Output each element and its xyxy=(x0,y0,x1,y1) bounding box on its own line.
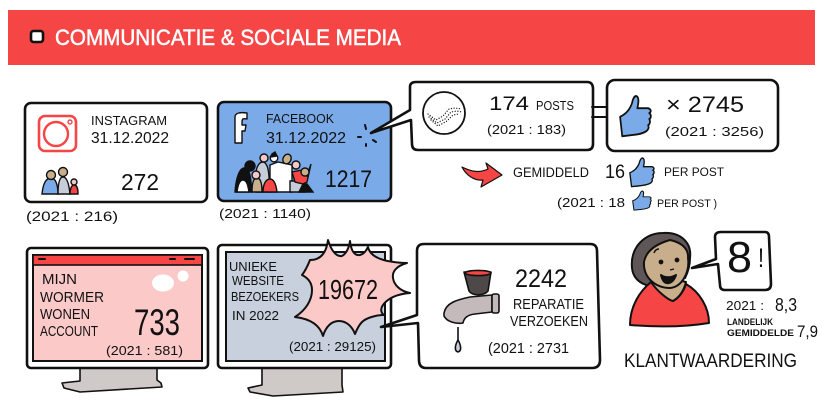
rating exclamation: ! xyxy=(758,243,764,273)
panel: facebook xyxy=(218,102,391,201)
repair label: VERZOEKEN xyxy=(510,314,588,330)
icon: crowd xyxy=(235,152,313,192)
likes count: × 2745 xyxy=(666,92,744,117)
rating value: 8 xyxy=(727,233,752,282)
panel: instagram xyxy=(25,103,207,202)
per post label: PER POST xyxy=(664,165,725,179)
connector between bubbles xyxy=(592,107,608,117)
website label: UNIEKE xyxy=(229,260,277,274)
account label xyxy=(40,271,104,340)
icon: facebook f xyxy=(235,113,247,143)
website label xyxy=(229,260,299,323)
rating 2021: 2021 : xyxy=(726,298,764,313)
website label: WEBSITE xyxy=(232,274,284,288)
icon: three people xyxy=(42,168,78,194)
posts count: 174 xyxy=(489,94,530,115)
account label: ACCOUNT xyxy=(40,323,98,340)
website count: 19672 xyxy=(318,274,378,305)
website label: BEZOEKERS xyxy=(231,290,299,304)
instagram previous year: (2021 : 216) xyxy=(26,208,118,224)
facebook date: 31.12.2022 xyxy=(266,130,346,147)
icon: header bullet xyxy=(31,31,43,42)
posts label: POSTS xyxy=(536,98,574,113)
panel: likes xyxy=(607,80,778,151)
account label: WORMER xyxy=(40,289,104,306)
header banner xyxy=(8,10,815,65)
arrow: red arrow xyxy=(462,163,502,187)
rating heading: KLANTWAARDERING xyxy=(624,351,797,372)
average value: 16 xyxy=(605,162,625,183)
panel: website monitor xyxy=(218,240,410,396)
panel: account monitor xyxy=(27,248,208,392)
rating speech bubble xyxy=(692,232,771,290)
website previous year: (2021 : 29125) xyxy=(289,340,376,354)
icon: round post image xyxy=(423,92,465,134)
monitor stand xyxy=(62,368,162,392)
panel: posts speech bubble xyxy=(371,82,593,150)
previous year per post: PER POST ) xyxy=(657,198,717,210)
account previous year: (2021 : 581) xyxy=(106,344,183,358)
icon: thumbs up tiny xyxy=(633,191,651,210)
national label: LANDELIJK xyxy=(727,317,773,328)
likes previous year: (2021 : 3256) xyxy=(665,124,764,139)
starburst xyxy=(295,240,410,336)
browser bar xyxy=(33,255,202,265)
monitor stand xyxy=(248,368,343,396)
website label: IN 2022 xyxy=(232,309,279,323)
icon: thumbs up xyxy=(620,96,651,136)
repair label xyxy=(510,297,588,330)
repair label: REPARATIE xyxy=(513,297,584,313)
icon: woman xyxy=(630,233,709,326)
repair count: 2242 xyxy=(515,265,567,293)
instagram heading: INSTAGRAM xyxy=(91,113,167,128)
national value: 7,9 xyxy=(797,322,818,341)
instagram count: 272 xyxy=(121,169,159,195)
repair previous year: (2021 : 2731 xyxy=(488,340,569,357)
facebook previous year: (2021 : 1140) xyxy=(219,206,311,221)
title: COMMUNICATIE & SOCIALE MEDIA xyxy=(55,25,401,50)
facebook heading: FACEBOOK xyxy=(266,111,334,126)
sparkle xyxy=(358,125,376,146)
account count: 733 xyxy=(134,302,180,343)
national label: GEMIDDELDE xyxy=(727,328,794,339)
instagram date: 31.12.2022 xyxy=(91,130,169,147)
posts previous year: (2021 : 183) xyxy=(487,123,566,137)
highlight xyxy=(152,270,188,292)
national label xyxy=(727,317,794,339)
previous year average: (2021 : 18 xyxy=(557,196,625,210)
average label: GEMIDDELD xyxy=(513,165,589,180)
rating 2021 value: 8,3 xyxy=(775,295,797,315)
panel: repair requests bubble xyxy=(381,244,600,368)
icon: thumbs up small xyxy=(630,158,654,187)
panel: customer rating xyxy=(624,232,818,372)
icon: dripping tap xyxy=(444,270,499,352)
account label: MIJN xyxy=(42,271,77,288)
account label: WONEN xyxy=(40,306,90,323)
facebook count: 1217 xyxy=(325,166,372,193)
icon: instagram logo xyxy=(39,116,76,151)
